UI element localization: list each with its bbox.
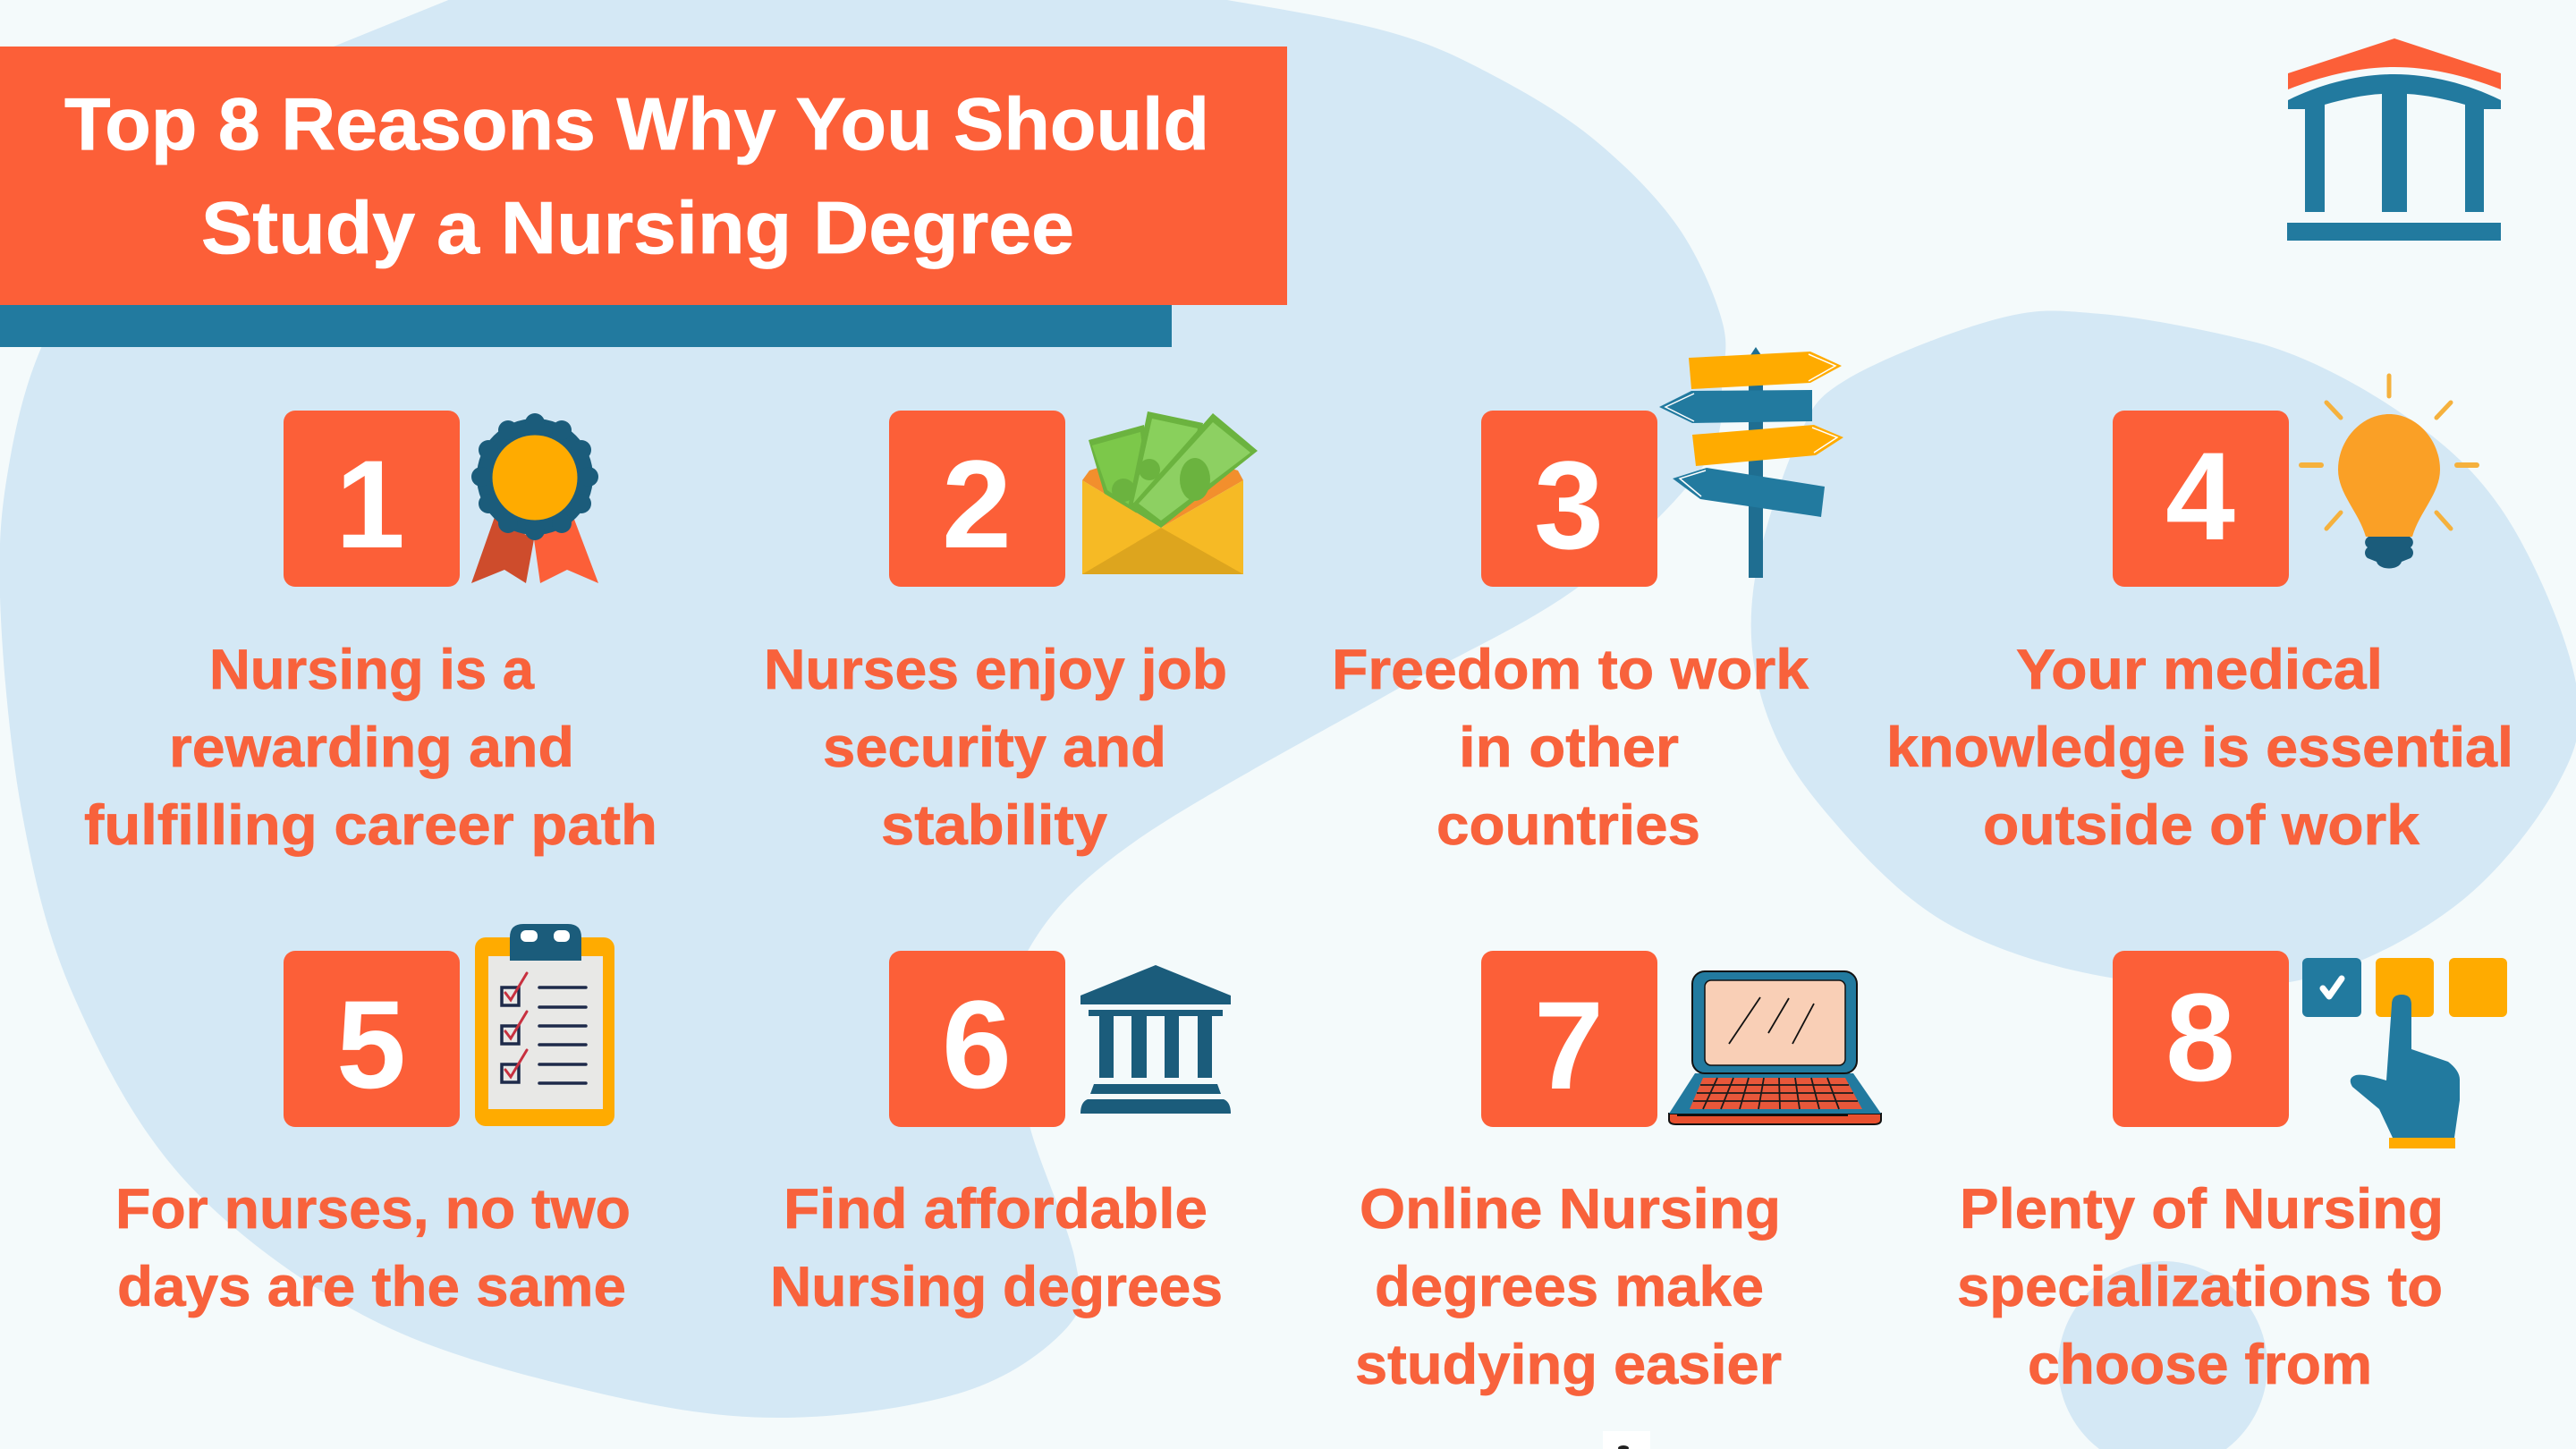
logo: temple [2287,38,2501,241]
number badge 6 [889,951,1065,1127]
panel: reason 5 [115,924,631,1318]
reason 5 text: days are the same [117,1256,626,1318]
number badge 5: 5 [336,974,406,1114]
title banner [0,47,1287,347]
reason 2 text: security and [823,716,1166,779]
icon: light bulb [2301,376,2477,569]
panel: reason 3 [1332,347,1843,857]
background blob: right [1751,310,2576,987]
small white mark at bottom edge [1603,1431,1650,1449]
reason 6 text: Nursing degrees [770,1256,1223,1318]
reason 1 text: fulfilling career path [84,794,657,857]
icon: award ribbon [471,413,598,583]
panel: reason 4 [1886,376,2513,857]
panel: reason 8 [1957,951,2507,1396]
banner shadow bar [0,305,1172,347]
banner background [0,47,1287,305]
number badge 5 [284,951,460,1127]
number badge 7 [1481,951,1657,1127]
reason 3 text: countries [1436,794,1700,857]
number badge 1: 1 [335,434,405,574]
title text: Top 8 Reasons Why You Should [64,82,1209,165]
title text: Study a Nursing Degree [201,186,1074,269]
number badge 7: 7 [1534,975,1604,1115]
icon: hand pressing selection tiles [2302,958,2507,1148]
number badge 3: 3 [1534,435,1604,575]
reason 8 text: choose from [2028,1334,2372,1396]
background blob: large left [0,0,1725,1418]
reason 7 text: Online Nursing [1360,1178,1781,1241]
panel: reason 2 [764,411,1258,857]
reason 4 text: outside of work [1983,794,2420,857]
number badge 2: 2 [942,434,1012,574]
icon: university building [1080,965,1231,1114]
reason 4 text: Your medical [2016,639,2383,701]
reason 7 text: degrees make [1375,1256,1764,1318]
reason 2 text: Nurses enjoy job [764,639,1227,701]
reason 3 text: Freedom to work [1332,639,1809,701]
icon: laptop [1669,971,1881,1124]
number badge 8 [2113,951,2289,1127]
number badge 2 [889,411,1065,587]
reason 1 text: rewarding and [169,716,574,779]
reason 2 text: stability [881,794,1107,857]
reason 1 text: Nursing is a [209,639,535,701]
icon: signpost [1659,347,1843,578]
panel: reason 1 [84,411,657,857]
icon: money envelope [1082,411,1258,574]
panel: reason 7 [1355,951,1881,1396]
background blob: small bottom circle [2058,1261,2267,1449]
number badge 3 [1481,411,1657,587]
number badge 4 [2113,411,2289,587]
reason 4 text: knowledge is essential [1886,716,2513,779]
reason 7 text: studying easier [1355,1334,1782,1396]
icon: clipboard checklist [475,924,614,1126]
number badge 4: 4 [2165,426,2235,566]
reason 8 text: Plenty of Nursing [1960,1178,2444,1241]
reason 5 text: For nurses, no two [115,1178,631,1241]
reason 3 text: in other [1459,716,1679,779]
panel: reason 6 [770,951,1231,1318]
number badge 1 [284,411,460,587]
number badge 6: 6 [942,974,1012,1114]
reason 8 text: specializations to [1957,1256,2443,1318]
number badge 8: 8 [2165,967,2235,1107]
reason 6 text: Find affordable [784,1178,1208,1241]
